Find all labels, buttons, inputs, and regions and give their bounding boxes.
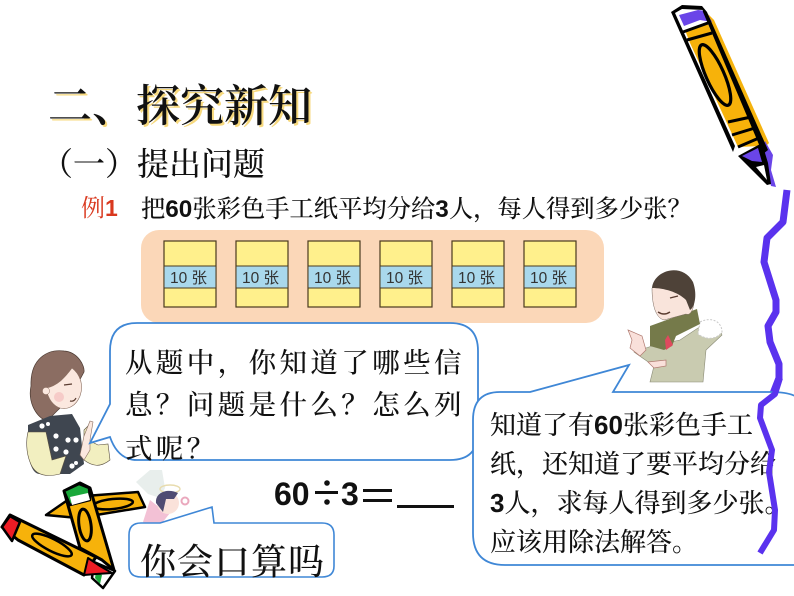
panel: paper stacks — [141, 230, 604, 323]
scarf — [650, 309, 700, 350]
bubble text: 纸，还知道了要平均分给 — [490, 450, 776, 479]
speech bubble: bottom — [129, 507, 334, 582]
hair — [30, 351, 84, 421]
icon: girl character — [27, 351, 110, 476]
title: 二、探究新知 — [50, 84, 314, 133]
card 3 — [308, 241, 360, 307]
coat — [634, 325, 722, 382]
equation: 60 — [274, 476, 310, 512]
crayon diagonal — [2, 515, 96, 575]
card 1 — [164, 241, 216, 307]
squiggle overlay — [760, 378, 780, 553]
card 2 — [236, 241, 288, 307]
body — [28, 414, 84, 474]
face — [46, 368, 82, 408]
card 4 — [380, 241, 432, 307]
icon: angel — [136, 470, 188, 523]
bubble text: 式呢？ — [125, 433, 218, 464]
speech bubble: right — [473, 365, 794, 565]
hair — [652, 270, 695, 310]
equation — [274, 476, 454, 512]
card 6 — [524, 241, 576, 307]
card 5: 10 张 — [458, 269, 496, 287]
bubble text: 知道了有60张彩色手工 — [490, 410, 753, 440]
icon: pencil top right — [671, 5, 776, 187]
card 4: 10 张 — [386, 269, 424, 287]
card 3: 10 张 — [314, 269, 352, 287]
example label: 例1 — [81, 195, 118, 222]
bubble text: 息？问题是什么？怎么列 — [125, 389, 465, 420]
bubble text: 从题中，你知道了哪些信 — [125, 347, 465, 378]
icon: crayons bottom left — [2, 483, 145, 588]
equation: 3 — [341, 476, 359, 512]
speech bubble: left — [90, 323, 478, 464]
equation: ÷ — [316, 503, 317, 506]
title: 二、探究新知 — [48, 82, 312, 131]
card 2: 10 张 — [242, 269, 280, 287]
hands — [628, 330, 646, 356]
icon: boy character — [628, 270, 722, 382]
card 1: 10 张 — [170, 269, 208, 287]
subtitle: （一）提出问题 — [41, 146, 265, 182]
face — [652, 279, 694, 320]
card 6: 10 张 — [530, 269, 568, 287]
card 5 — [452, 241, 504, 307]
bubble text: 3人，求每人得到多少张。 — [490, 488, 790, 518]
crayon horizontal — [46, 492, 145, 518]
decorative purple squiggle — [764, 190, 787, 396]
bubble text: 你会口算吗 — [140, 542, 325, 582]
crayon vertical — [64, 483, 114, 570]
question text: 把60张彩色手工纸平均分给3人，每人得到多少张？ — [141, 196, 692, 223]
bubble text: 应该用除法解答。 — [490, 528, 698, 557]
